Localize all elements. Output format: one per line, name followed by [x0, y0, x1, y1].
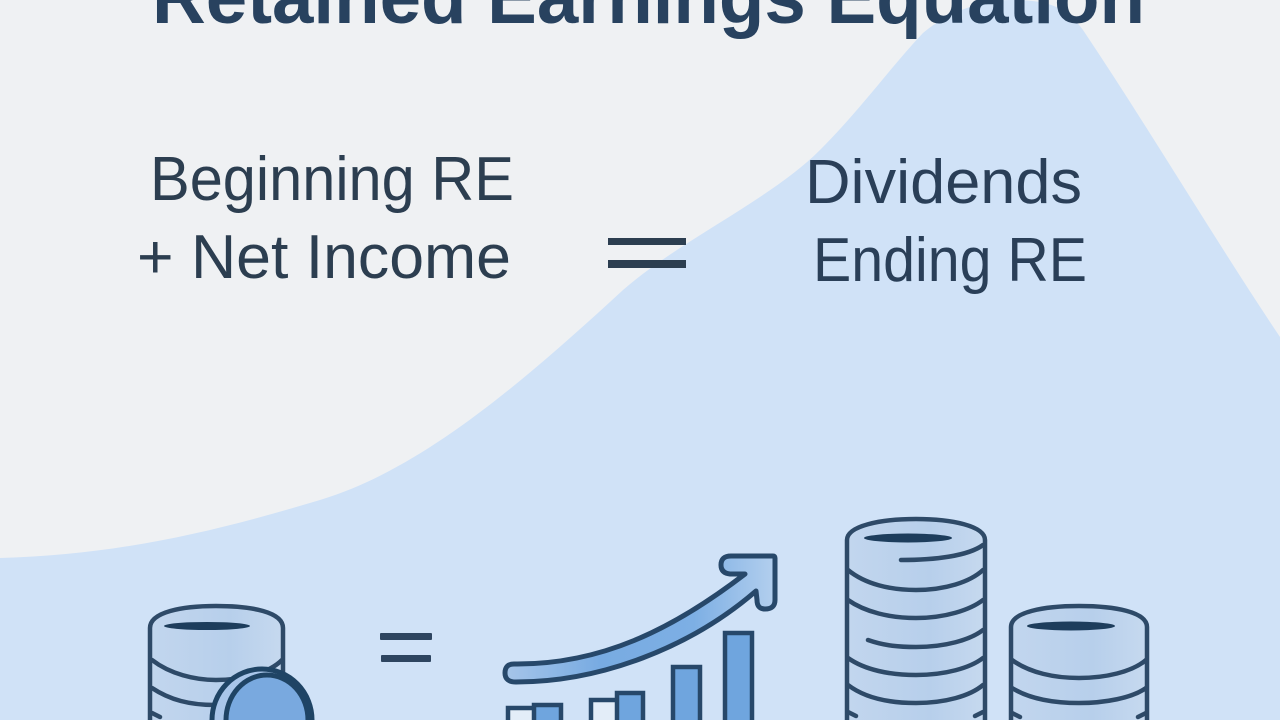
right side of equation: Dividends: [805, 148, 1082, 217]
right side of equation: [805, 148, 1087, 295]
icon: coin stack with coin: [150, 606, 312, 720]
left side of equation: [137, 145, 514, 292]
bar chart: [508, 633, 752, 720]
equals sign: icon row: [380, 633, 432, 662]
left side of equation: Beginning RE: [150, 145, 514, 214]
left side of equation: + Net Income: [137, 223, 511, 292]
right side of equation: Ending RE: [813, 226, 1087, 295]
arrow: growth trend: [505, 556, 775, 682]
icon: short coin stack: [1011, 606, 1147, 720]
icon: tall coin stack: [847, 519, 985, 720]
equals sign: main equation: [608, 238, 686, 268]
